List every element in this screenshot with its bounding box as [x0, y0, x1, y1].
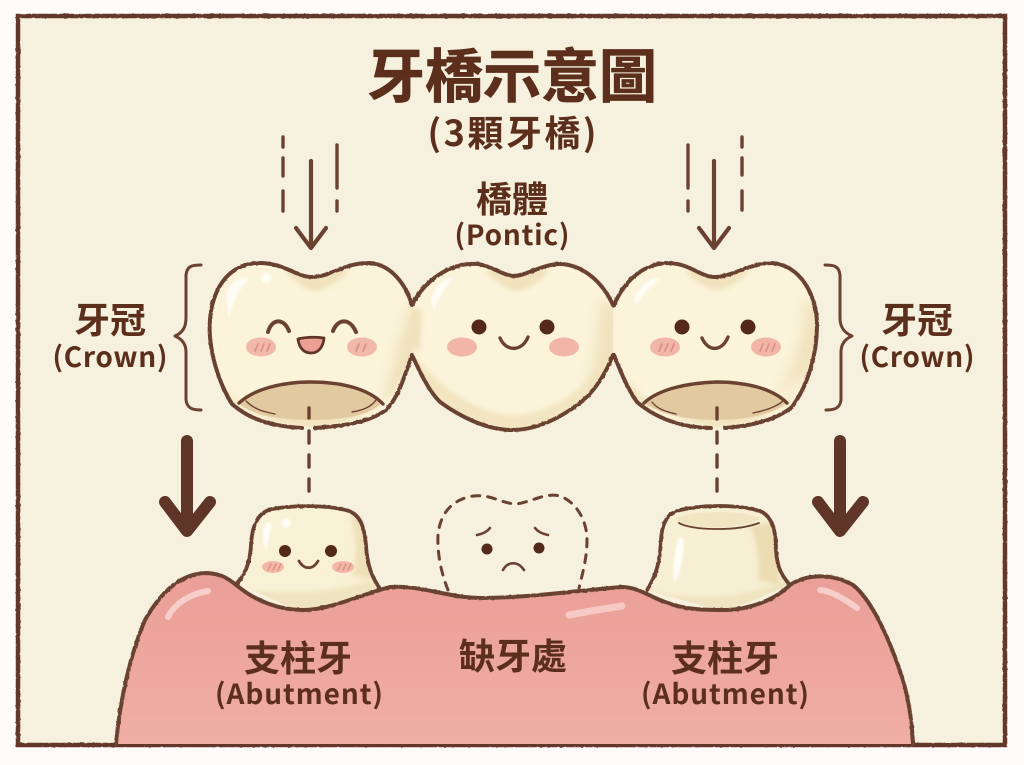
bridge: three connected teeth: [200, 255, 823, 435]
dashed guide: left crown to abutment: [307, 408, 311, 491]
gum: [116, 573, 913, 744]
label: left crown: [52, 292, 168, 376]
label: left abutment: [215, 630, 383, 713]
label: left crown: (Crown): [52, 336, 168, 376]
tooth: pontic: [405, 255, 620, 435]
label: right abutment: [641, 630, 809, 713]
label: pontic: (Pontic): [454, 214, 570, 254]
arrow: left placement: [165, 441, 210, 531]
face: left abutment: [262, 545, 354, 573]
label: left abutment: 支柱牙: [244, 630, 352, 682]
dashed guide: right crown to abutment: [715, 408, 719, 491]
label: pontic: 橋體: [476, 171, 548, 223]
right abutment tooth prepared: [645, 504, 790, 608]
title: 牙橋示意圖: [367, 30, 657, 114]
label: left crown: 牙冠: [74, 292, 146, 344]
label: pontic: [454, 171, 570, 254]
label: right abutment: (Abutment): [641, 673, 809, 713]
bracket: right crown: [825, 265, 852, 410]
face: happy crown: [246, 321, 377, 356]
label: right crown: [860, 292, 974, 376]
label: missing tooth area: 缺牙處: [459, 628, 567, 680]
face: smiling right crown: [650, 320, 781, 356]
label: right crown: (Crown): [860, 336, 974, 376]
bracket: left crown: [175, 265, 201, 410]
arrow: left insertion with motion lines: [283, 137, 337, 248]
face: sad missing tooth: [477, 528, 548, 570]
label: right abutment: 支柱牙: [671, 630, 779, 682]
subtitle: (3顆牙橋): [428, 105, 596, 157]
left abutment tooth: [236, 504, 382, 608]
label: left abutment: (Abutment): [215, 673, 383, 713]
arrow: right insertion with motion lines: [688, 137, 742, 248]
arrow: right placement: [818, 441, 863, 531]
missing tooth outline: [438, 495, 587, 590]
tooth: left crown: [208, 260, 412, 430]
label: right crown: 牙冠: [881, 292, 953, 344]
face: pontic: [447, 320, 579, 356]
tooth: right crown: [608, 255, 823, 435]
